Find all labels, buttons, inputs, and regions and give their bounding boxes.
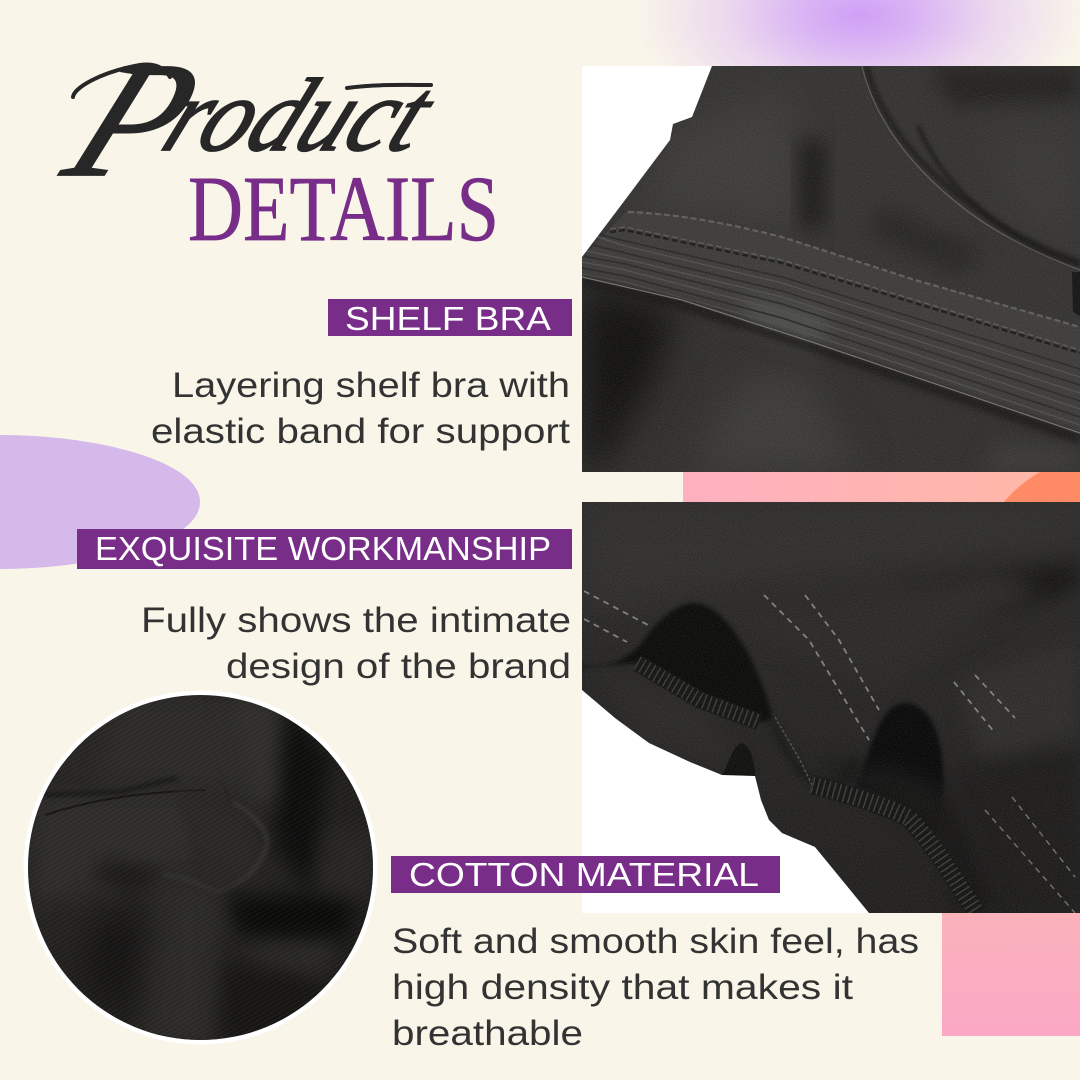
photo: fabric swirl circle: [24, 690, 378, 1045]
fabric grain: [582, 502, 1080, 913]
description: cotton material: [392, 922, 919, 1053]
section: cotton material: [391, 856, 919, 1053]
description: cotton material: breathable: [392, 1014, 583, 1053]
description: exquisite workmanship: design of the brand: [226, 647, 571, 686]
section: shelf bra: [151, 299, 572, 451]
background cut-out: [582, 690, 869, 913]
title: script word: [42, 29, 466, 211]
fold shadows: [582, 603, 772, 722]
photo: shelf bra elastic band: [582, 66, 1080, 472]
tag: cotton material: COTTON MATERIAL: [409, 856, 759, 893]
fabric grain: [582, 66, 1080, 472]
pink strip between photos: [683, 472, 1080, 502]
description: shelf bra: [151, 366, 570, 451]
lower fabric: [582, 277, 1080, 472]
title: serif word: DETAILS: [188, 158, 499, 261]
title: script word: roduct: [148, 57, 454, 173]
tag: exquisite workmanship: EXQUISITE WORKMANSHIP: [95, 530, 551, 567]
overlock seams: [637, 663, 977, 913]
description: cotton material: Soft and smooth skin feel, has: [392, 922, 919, 961]
description: shelf bra: Layering shelf bra with: [172, 366, 570, 405]
band stitching: [610, 212, 1080, 353]
title: script word: P: [42, 29, 225, 211]
description: shelf bra: elastic band for support: [151, 412, 570, 451]
description: cotton material: high density that makes it: [392, 968, 853, 1007]
neckline seam: [862, 66, 1080, 270]
elastic band: [582, 210, 1080, 433]
description: exquisite workmanship: [141, 601, 571, 686]
photo: hem stitching: [582, 502, 1080, 913]
tag: shelf bra: SHELF BRA: [345, 300, 551, 337]
pink square lower right: [942, 913, 1080, 1036]
left lilac ellipse: [0, 435, 200, 569]
top purple glow: [620, 0, 1080, 66]
stitches: [584, 591, 1015, 740]
background cut-out: [582, 66, 712, 257]
description: exquisite workmanship: Fully shows the intimate: [141, 601, 571, 640]
section: exquisite workmanship: [77, 529, 572, 686]
